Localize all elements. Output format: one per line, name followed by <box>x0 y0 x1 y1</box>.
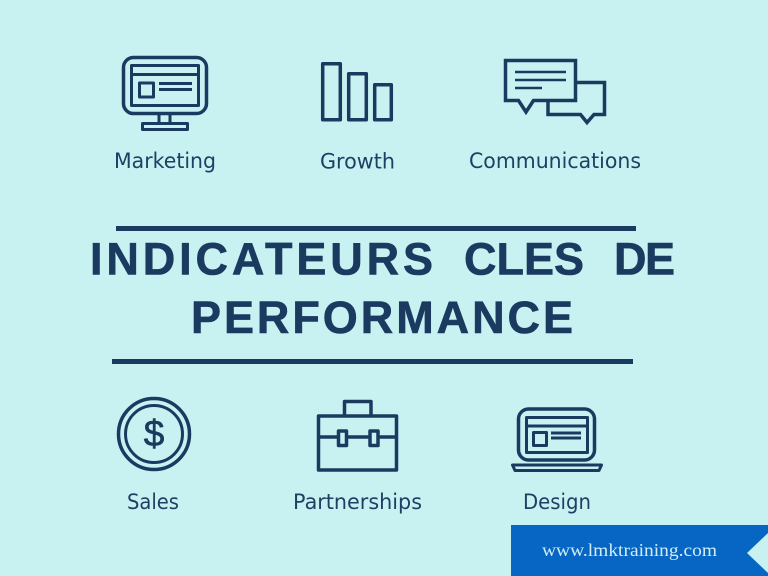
title rule: bottom <box>112 359 633 364</box>
banner: website ribbon <box>511 525 768 576</box>
label: Sales: Sales <box>127 490 179 514</box>
title rule: top <box>116 226 636 231</box>
label: Marketing: Marketing <box>114 149 216 173</box>
icon: dollar coin <box>118 398 190 470</box>
title: PERFORMANCE <box>191 292 573 343</box>
title: CLES <box>464 234 584 284</box>
label: Communications: Communications <box>469 149 641 173</box>
icon: laptop <box>512 409 602 470</box>
website address: www.lmktraining.com <box>542 540 717 560</box>
title <box>90 234 675 343</box>
icon: briefcase <box>318 402 396 470</box>
icon: monitor <box>124 58 206 130</box>
label: Growth: Growth <box>320 150 395 174</box>
icon: dollar coin: $ <box>144 413 164 454</box>
label: Partnerships: Partnerships <box>293 490 422 514</box>
title: DE <box>614 234 675 284</box>
title: INDICATEURS <box>90 234 433 284</box>
icon: speech bubbles <box>506 60 604 122</box>
icon: bar chart <box>323 64 391 120</box>
label: Design: Design <box>523 490 591 514</box>
